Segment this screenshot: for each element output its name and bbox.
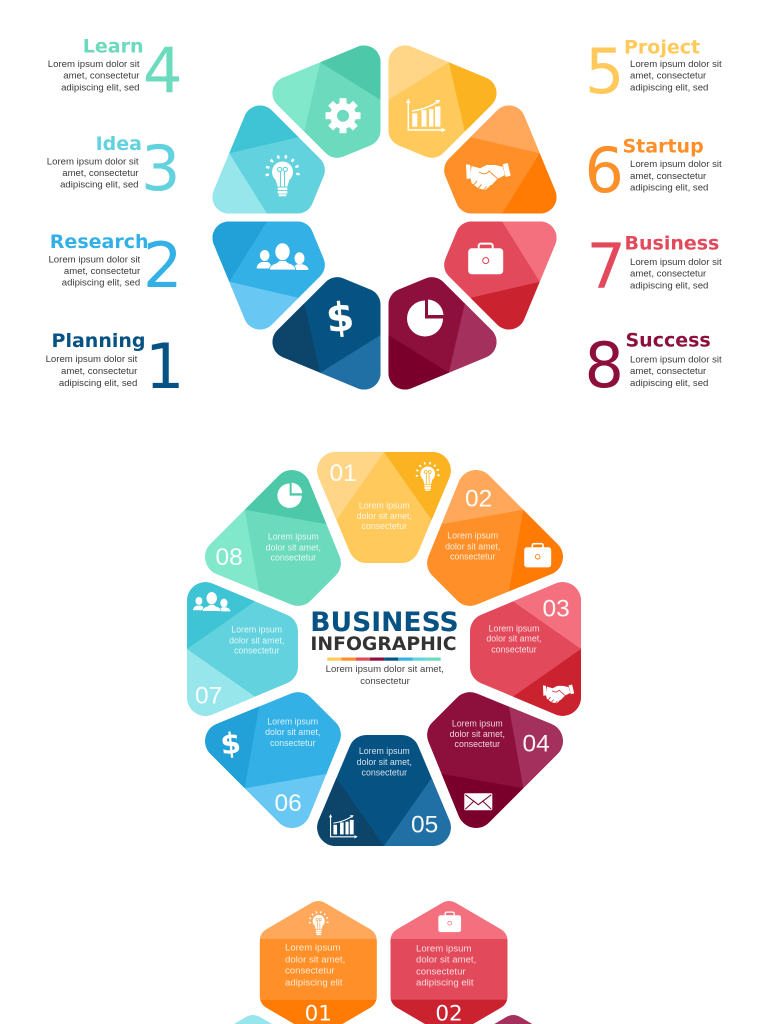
label 1 planning: adipiscing elit, sed xyxy=(59,378,137,389)
text block 05: dolor sit amet, xyxy=(357,757,412,767)
text block 08: consectetur xyxy=(271,553,316,563)
segment 01 yellow xyxy=(317,452,451,563)
number 04: 04 xyxy=(522,731,550,758)
icon: light bulb xyxy=(267,157,298,196)
text hexagon 02: Lorem ipsum xyxy=(416,943,471,954)
label 7 business: Business xyxy=(624,232,719,254)
label 2 research: 2 xyxy=(143,229,182,302)
icon: pie chart xyxy=(407,300,444,336)
icon: dollar 06: $ xyxy=(219,726,242,762)
text block 07: dolor sit amet, xyxy=(229,635,284,645)
label 3 idea xyxy=(47,132,180,205)
text block 08: Lorem ipsum xyxy=(268,531,319,541)
label 4 learn xyxy=(48,34,182,107)
text hexagon 01: dolor sit amet, xyxy=(285,954,345,965)
icon: pie 08 xyxy=(277,483,302,508)
number 05: 05 xyxy=(411,812,438,839)
text block 06: Lorem ipsum xyxy=(267,717,318,727)
right labels column xyxy=(584,35,722,402)
icon: people xyxy=(257,243,308,270)
icon: chart 05 xyxy=(329,814,358,838)
text block 02: dolor sit amet, xyxy=(445,541,500,551)
icon: dollar sign: $ xyxy=(324,294,356,342)
subtitle: Lorem ipsum dolor sit amet, xyxy=(326,664,444,675)
label 7 business: adipiscing elit, sed xyxy=(630,280,708,292)
hexagon cyan partial xyxy=(234,1015,272,1024)
segment 03 red xyxy=(470,582,581,716)
label 8 success: Success xyxy=(626,330,711,352)
label 1 planning: amet, consectetur xyxy=(61,366,138,377)
label 8 success: amet, consectetur xyxy=(630,366,707,377)
label 2 research: amet, consectetur xyxy=(64,266,141,277)
title: infographic: INFOGRAPHIC xyxy=(310,634,457,655)
segment: idea cyan xyxy=(212,106,325,214)
text block 05: consectetur xyxy=(362,767,407,777)
label 1 planning: Lorem ipsum dolor sit xyxy=(46,354,138,365)
label 4 learn: 4 xyxy=(143,34,182,107)
icon: handshake 03 xyxy=(543,684,574,704)
text block 01: consectetur xyxy=(362,521,407,531)
number 07: 07 xyxy=(195,682,222,709)
text hexagon 02: adipiscing elit xyxy=(416,978,474,989)
text block 08: dolor sit amet, xyxy=(266,542,321,552)
label 4 learn: amet, consectetur xyxy=(63,71,140,82)
segment 02 orange xyxy=(427,470,563,606)
icon: envelope 04 xyxy=(464,793,492,810)
label 2 research: Lorem ipsum dolor sit xyxy=(48,254,141,266)
label 3 idea: amet, consectetur xyxy=(62,168,139,179)
label 6 startup: Startup xyxy=(622,136,704,158)
segment: success crimson xyxy=(388,277,496,390)
segment 06 blue xyxy=(205,692,341,828)
hexagon 01 orange xyxy=(258,895,378,1024)
title: business: BUSINESS xyxy=(310,607,459,638)
icon: briefcase xyxy=(468,244,503,274)
segment 05 navy xyxy=(317,735,451,846)
label 7 business: 7 xyxy=(586,230,626,303)
text hexagon 02: dolor sit amet, xyxy=(416,954,476,965)
segment 07 cyan xyxy=(187,582,298,716)
label 8 success: adipiscing elit, sed xyxy=(630,378,708,389)
number 01: 01 xyxy=(330,460,357,487)
hexagon crimson partial xyxy=(494,1015,532,1024)
subtitle: consectetur xyxy=(360,676,411,687)
segment 04 crimson xyxy=(427,692,563,828)
label 7 business xyxy=(586,230,722,303)
icon: bulb hexagon 01 xyxy=(310,912,328,935)
label 5 project: amet, consectetur xyxy=(630,71,707,82)
label 3 idea: adipiscing elit, sed xyxy=(60,180,138,190)
text hexagon 01: adipiscing elit xyxy=(285,977,343,988)
label 3 idea: Lorem ipsum dolor sit xyxy=(47,156,139,168)
number 08: 08 xyxy=(216,544,243,571)
text block 01: Lorem ipsum xyxy=(359,500,410,510)
icon: people 07 xyxy=(193,592,230,611)
text block 01: dolor sit amet, xyxy=(357,511,412,521)
label 6 startup: 6 xyxy=(584,134,624,207)
label 8 success: 8 xyxy=(584,329,624,402)
text hexagon 02: consectetur xyxy=(416,967,466,978)
label 5 project: Project xyxy=(624,36,700,58)
label 4 learn: Learn xyxy=(83,36,144,58)
label 6 startup: adipiscing elit, sed xyxy=(630,182,708,194)
segment: business red xyxy=(444,222,556,330)
label 2 research: Research xyxy=(50,231,148,253)
label 2 research xyxy=(48,229,182,302)
text block 04: Lorem ipsum xyxy=(452,719,503,729)
text block 05: Lorem ipsum xyxy=(359,746,410,756)
colour bar xyxy=(327,658,441,661)
segment: planning navy xyxy=(272,277,381,390)
text block 07: consectetur xyxy=(234,646,280,656)
icon: gear xyxy=(326,98,360,133)
label 6 startup xyxy=(584,134,722,207)
number 02: 02 xyxy=(465,486,492,513)
icon: handshake xyxy=(466,163,511,191)
panel: ring two xyxy=(187,452,581,846)
text block 04: dolor sit amet, xyxy=(450,729,505,739)
segment: project yellow xyxy=(388,46,496,158)
label 7 business: amet, consectetur xyxy=(630,268,707,280)
text block 02: consectetur xyxy=(450,552,496,562)
label 8 success xyxy=(584,329,722,402)
text block 04: consectetur xyxy=(455,739,500,749)
number 03: 03 xyxy=(542,596,570,623)
text block 06: consectetur xyxy=(270,738,316,748)
icon: briefcase hexagon 02 xyxy=(438,912,461,932)
label 8 success: Lorem ipsum dolor sit xyxy=(630,354,722,366)
label 6 startup: Lorem ipsum dolor sit xyxy=(630,159,722,170)
segment: research blue xyxy=(212,222,325,330)
text hexagon 01: Lorem ipsum xyxy=(285,942,340,953)
panel: hexagon section xyxy=(234,901,532,1024)
panel: ring one xyxy=(212,46,556,390)
label 2 research: adipiscing elit, sed xyxy=(62,278,140,288)
text block 03: consectetur xyxy=(491,645,537,655)
label 5 project: 5 xyxy=(585,35,624,108)
text block 06: dolor sit amet, xyxy=(265,727,320,737)
label 5 project: adipiscing elit, sed xyxy=(630,82,708,94)
label 5 project xyxy=(585,35,722,108)
title block xyxy=(310,607,459,687)
label 5 project: Lorem ipsum dolor sit xyxy=(630,59,722,70)
icon: bulb 01 xyxy=(417,463,439,491)
text block 03: Lorem ipsum xyxy=(489,623,539,633)
label 4 learn: Lorem ipsum dolor sit xyxy=(48,59,140,70)
text block 07: Lorem ipsum xyxy=(231,624,282,634)
label 3 idea: Idea xyxy=(96,133,142,155)
label 1 planning: Planning xyxy=(52,330,146,352)
label 4 learn: adipiscing elit, sed xyxy=(61,82,140,94)
text hexagon 01: consectetur xyxy=(285,966,335,977)
left labels column xyxy=(46,34,184,403)
text block 02: Lorem ipsum xyxy=(447,530,498,540)
number 06: 06 xyxy=(274,790,302,817)
segment: learn green xyxy=(272,46,381,158)
label 7 business: Lorem ipsum dolor sit xyxy=(630,257,722,268)
label 1 planning xyxy=(46,330,184,403)
label 6 startup: amet, consectetur xyxy=(630,171,707,182)
segment 08 green xyxy=(205,470,341,606)
label 3 idea: 3 xyxy=(141,132,180,205)
icon: briefcase 02 xyxy=(524,544,551,567)
icon: growth chart xyxy=(406,98,446,132)
segment: startup orange xyxy=(444,106,556,214)
text block 03: dolor sit amet, xyxy=(486,634,542,644)
hexagon 02 red xyxy=(389,895,509,1024)
label 1 planning: 1 xyxy=(145,330,184,403)
